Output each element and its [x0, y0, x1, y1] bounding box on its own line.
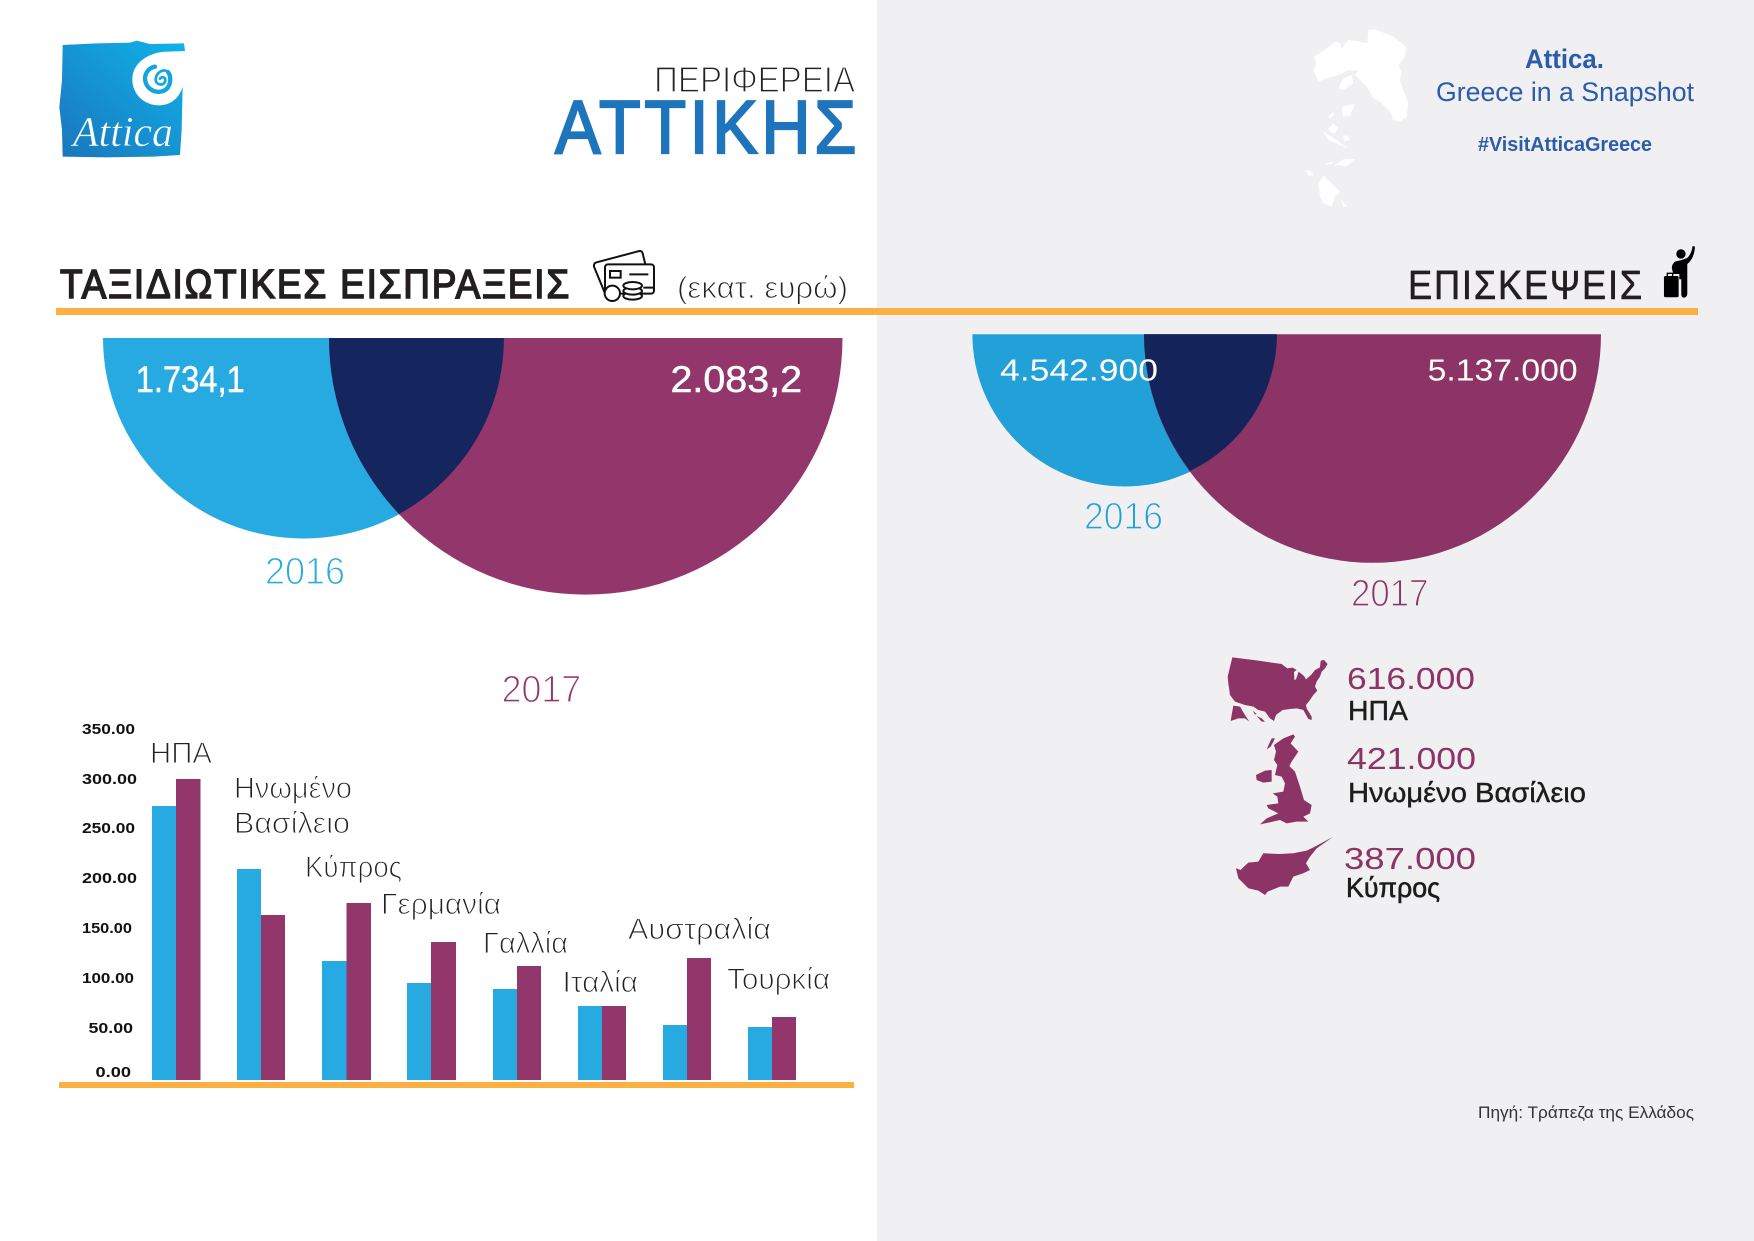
panel: right background: [877, 0, 1754, 1241]
text block: tagline: Attica.: [1525, 44, 1604, 74]
y axis labels: 200.00: [82, 871, 137, 887]
icon: USA map: [1228, 657, 1328, 722]
semicircle: 2016 visits: [972, 334, 1277, 486]
chart: receipts by country bars: [59, 722, 854, 1088]
value 2016: 4.542.900: [1000, 353, 1158, 388]
country labels: Τουρκία: [727, 963, 830, 996]
label: Cyprus: Κύπρος: [1346, 872, 1440, 903]
overlap: [329, 338, 504, 514]
value 2017: 5.137.000: [1428, 353, 1578, 388]
icon: UK map: [1256, 734, 1312, 824]
label: USA: ΗΠΑ: [1348, 695, 1408, 726]
title: region name: ΠΕΡΙΦΕΡΕΙΑ: [654, 59, 855, 100]
value: USA: 616.000: [1347, 661, 1475, 696]
y axis labels: [82, 722, 137, 1081]
logo: Attica: Attica: [70, 110, 173, 156]
unit label: (εκατ. ευρώ): [677, 270, 848, 305]
country labels: Βασίλειο: [234, 807, 350, 840]
text block: tagline: #VisitAtticaGreece: [1478, 134, 1652, 156]
overlap: [1144, 334, 1277, 471]
icon: Cyprus map: [1236, 837, 1333, 895]
y axis labels: 100.00: [82, 971, 134, 987]
year 2017: 2017: [1351, 573, 1428, 615]
y axis labels: 350.00: [82, 722, 135, 738]
divider: orange rule: [56, 308, 1698, 315]
heading: travel receipts: ΤΑΞΙΔΙΩΤΙΚΕΣ ΕΙΣΠΡΑΞΕΙΣ: [60, 261, 571, 307]
chart: visits venn: [972, 334, 1601, 615]
icon: cards and coins: [594, 251, 654, 301]
semicircle: 2017 visits: [1144, 334, 1601, 563]
icon: map of Attica: [1306, 29, 1408, 207]
text block: tagline: [1436, 44, 1694, 156]
value: Cyprus: 387.000: [1344, 841, 1476, 876]
y axis labels: 250.00: [82, 821, 135, 837]
text block: tagline: Greece in a Snapshot: [1436, 77, 1694, 107]
country labels: Κύπρος: [305, 851, 402, 884]
country labels: Αυστραλία: [628, 913, 771, 946]
country labels: [150, 737, 830, 999]
list: top visitor countries: [1228, 657, 1586, 903]
value: UK: 421.000: [1347, 741, 1476, 776]
bars 2017: [176, 779, 796, 1080]
value 2016: 1.734,1: [136, 359, 245, 400]
title: region name: ΑΤΤΙΚΗΣ: [555, 85, 860, 169]
country labels: Ηνωμένο: [234, 772, 352, 805]
label: UK: Ηνωμένο Βασίλειο: [1348, 777, 1586, 808]
country labels: Γαλλία: [483, 927, 568, 960]
year 2016: 2016: [265, 551, 345, 593]
y axis labels: 300.00: [82, 772, 137, 788]
year 2016: 2016: [1084, 496, 1163, 538]
icon: traveller with suitcase: [1664, 246, 1695, 298]
country labels: Ιταλία: [562, 966, 638, 999]
semicircle: 2016 receipts: [103, 338, 504, 539]
y axis labels: 0.00: [96, 1065, 131, 1081]
axis baseline: [59, 1082, 854, 1088]
value 2017: 2.083,2: [670, 359, 802, 400]
y axis labels: 150.00: [82, 921, 132, 937]
country labels: Γερμανία: [381, 888, 501, 921]
chart: receipts venn: [103, 338, 842, 711]
source note: Πηγή: Τράπεζα της Ελλάδος: [1478, 1103, 1694, 1122]
year 2017: 2017: [502, 669, 581, 711]
semicircle: 2017 receipts: [329, 338, 842, 595]
y axis labels: 50.00: [88, 1021, 133, 1037]
heading: visits: ΕΠΙΣΚΕΨΕΙΣ: [1408, 262, 1644, 308]
country labels: ΗΠΑ: [150, 737, 212, 770]
logo: Attica: [59, 41, 185, 157]
bars 2016: [152, 806, 772, 1080]
